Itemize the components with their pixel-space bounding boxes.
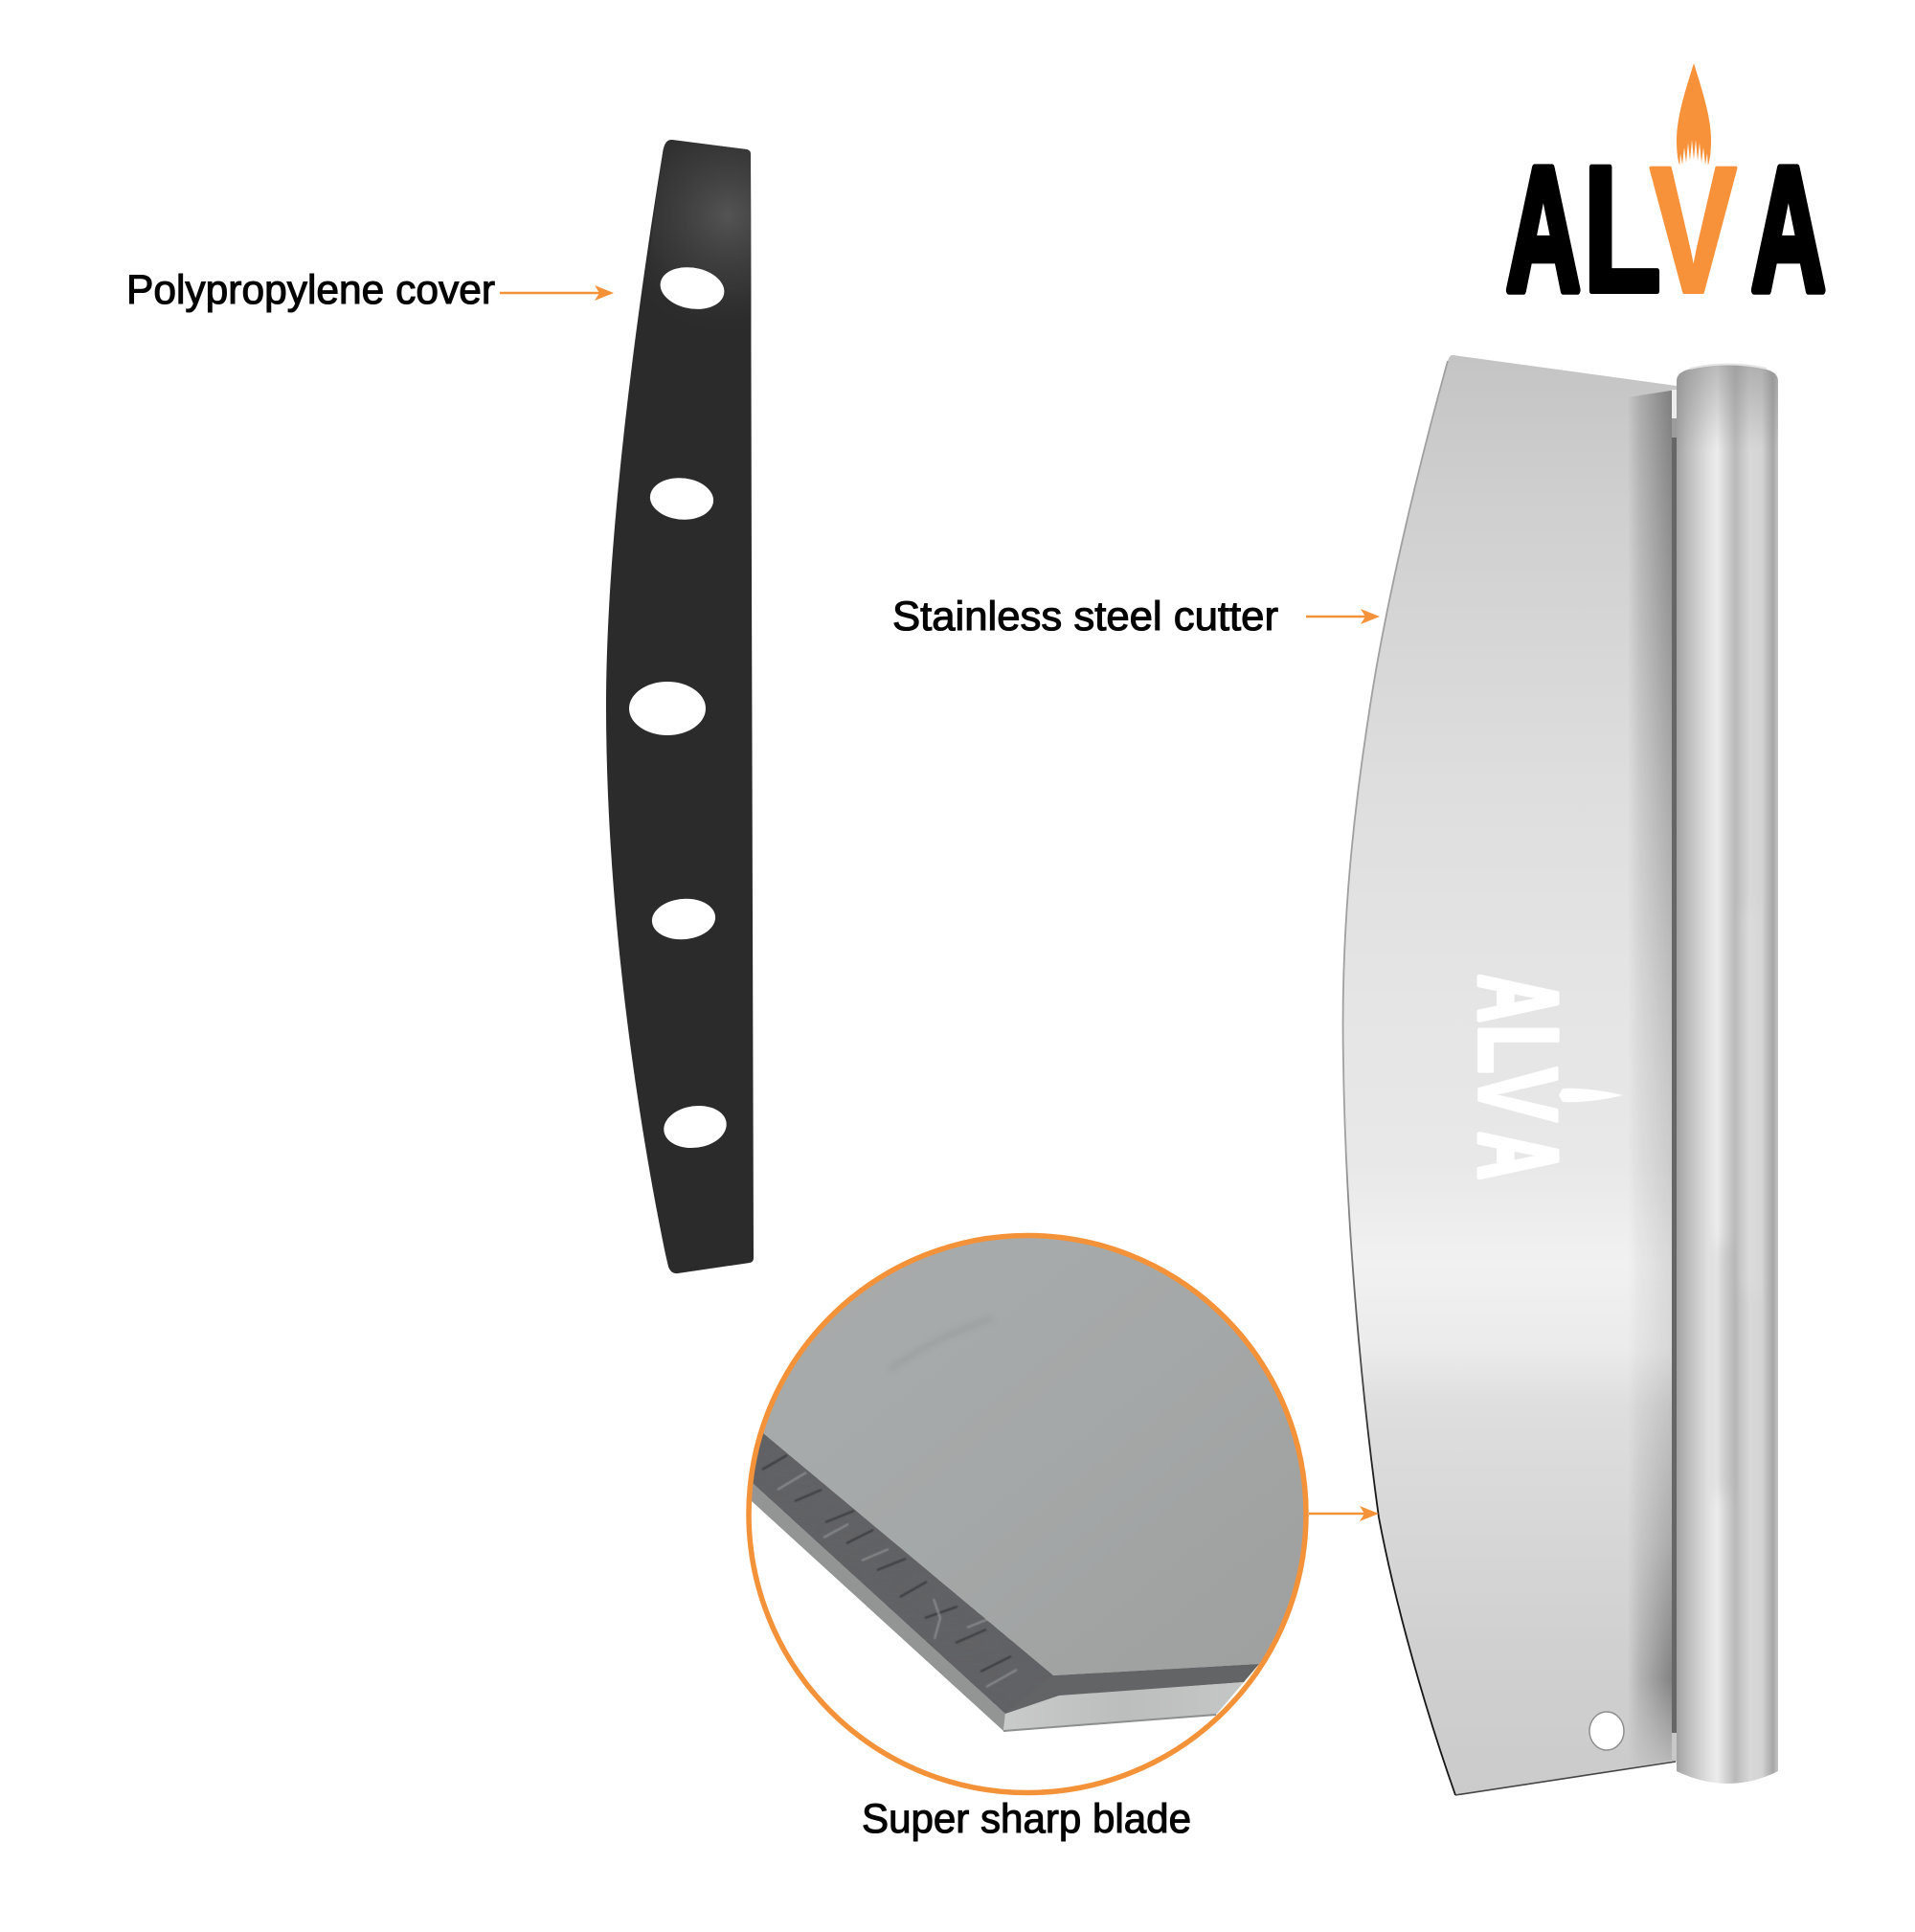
- blade edge: [1343, 361, 1455, 1795]
- polypropylene cover: [606, 140, 754, 1273]
- label: Super sharp blade: Super sharp blade: [862, 1796, 1191, 1842]
- engraved letters: A: [1455, 1132, 1579, 1179]
- label: Polypropylene cover: Polypropylene cover: [126, 267, 495, 313]
- engraved letters: V: [1453, 1067, 1580, 1123]
- front bevel dark strip: [1005, 1664, 1259, 1714]
- engraved letters: L: [1455, 1023, 1582, 1074]
- callout ring: [749, 1235, 1306, 1792]
- logo: ALVA flame wordmark: [1506, 63, 1826, 330]
- logo letters: V: [1650, 128, 1737, 330]
- slit between blade and handle: [1672, 390, 1678, 1760]
- stainless plate surface: [737, 1225, 1312, 1675]
- bevel lower lip: [737, 1474, 1005, 1731]
- logo letters: A: [1751, 130, 1826, 327]
- dark bevel band: [753, 1433, 1053, 1714]
- label: Stainless steel cutter: Stainless steel cutter: [892, 594, 1278, 640]
- engraved letters: A: [1455, 975, 1579, 1022]
- callout plate and bevel: [752, 1238, 1304, 1732]
- shading beside the handle: [1628, 390, 1677, 1767]
- arrow: to polypropylene cover: [500, 285, 614, 301]
- logo letters: [1506, 128, 1826, 330]
- bevel grind marks: [762, 1455, 1017, 1687]
- arrow: callout to blade edge: [1309, 1506, 1379, 1521]
- logo letters: L: [1583, 128, 1661, 329]
- lip shadow: [1003, 1715, 1216, 1731]
- rocker blade: [1343, 355, 1678, 1795]
- handle tube: [1677, 364, 1778, 1784]
- front bevel light lip: [1003, 1682, 1244, 1731]
- engraved ALVA logo on blade: [1453, 975, 1623, 1179]
- engraved letters: [1453, 975, 1582, 1179]
- handle top rim highlight: [1690, 364, 1767, 369]
- arrow: to stainless steel cutter: [1306, 609, 1380, 624]
- blade bottom edge: [1455, 1762, 1676, 1795]
- zoom callout circle: blade detail: [737, 1225, 1321, 1809]
- blade rivet hole: [1589, 1712, 1624, 1750]
- logo letters: A: [1506, 130, 1581, 327]
- cover highlight: [632, 140, 752, 383]
- logo flame: [1677, 63, 1711, 168]
- handle shading streaks: [1720, 910, 1754, 1494]
- engraved flame: [1559, 1089, 1623, 1102]
- faint scratch on plate: [890, 1318, 992, 1370]
